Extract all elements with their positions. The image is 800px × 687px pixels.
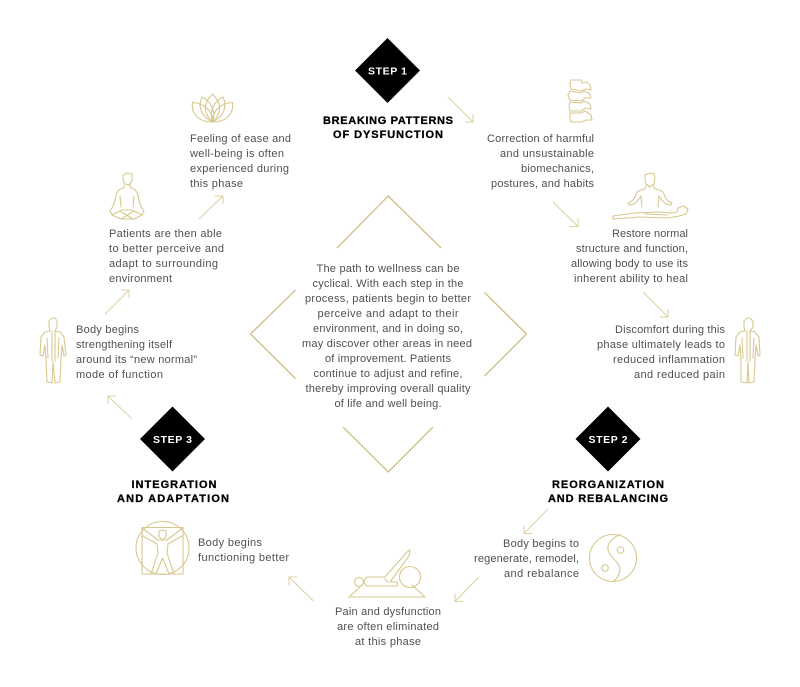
arrow: step 3 to strengthening <box>108 396 132 419</box>
text: functioning better: Body begins <box>198 537 262 549</box>
text: patients perceive: to better perceive and <box>109 243 224 255</box>
central diamond frame <box>250 196 526 472</box>
text: pain <box>335 606 441 648</box>
step 1 heading: BREAKING PATTERNS <box>323 115 453 127</box>
step 2 heading: AND REBALANCING <box>548 493 668 505</box>
text: regenerate: Body begins to <box>503 538 579 550</box>
icon: massage <box>613 173 688 219</box>
text: correction: Correction of harmful <box>487 133 594 145</box>
central text: of life and well being. <box>334 398 442 410</box>
arrow: spine to massage <box>553 202 578 226</box>
text: patients perceive: environment <box>109 273 172 285</box>
step 2 heading: REORGANIZATION <box>552 479 664 491</box>
text: strengthening: mode of function <box>76 369 163 381</box>
icon: body figure right <box>735 318 760 383</box>
text: regenerate <box>474 538 579 580</box>
text: strengthening: Body begins <box>76 324 140 336</box>
text: restore: structure and function, <box>576 243 688 255</box>
text: regenerate: and rebalance <box>504 568 579 580</box>
text: patients perceive: Patients are then able <box>109 228 222 240</box>
text: restore <box>571 228 688 285</box>
text: patients perceive <box>109 228 224 285</box>
central text: thereby improving overall quality <box>306 383 471 395</box>
arrow: step 1 to spine <box>448 97 473 122</box>
central text: of improvement. Patients <box>325 353 452 365</box>
step 2 badge: STEP 2 <box>588 434 628 446</box>
icon: body figure left <box>40 318 66 383</box>
icon: meditating figure <box>110 173 144 219</box>
text: feeling of ease: Feeling of ease and <box>190 133 291 145</box>
step 3 heading: AND ADAPTATION <box>117 493 229 505</box>
text: discomfort: Discomfort during this <box>615 324 726 336</box>
central text: environment, and in doing so, <box>313 323 463 335</box>
step 2 heading <box>548 479 668 505</box>
icon: lotus <box>192 94 233 122</box>
arrow: strengthening to patients <box>105 290 129 314</box>
text: functioning better <box>198 537 289 564</box>
text: functioning better: functioning better <box>198 552 289 564</box>
text: feeling of ease <box>189 133 291 190</box>
central text: perceive and adapt to their <box>318 308 459 320</box>
text: correction: biomechanics, <box>521 163 594 175</box>
step 1 heading: OF DYSFUNCTION <box>333 129 443 141</box>
step 2 badge <box>576 406 640 472</box>
step 3 heading: INTEGRATION <box>132 479 217 491</box>
text: discomfort <box>597 324 726 381</box>
arrow: pain to functioning <box>289 577 314 601</box>
text: restore: allowing body to use its <box>571 258 688 270</box>
icon: vitruvian man <box>136 522 189 574</box>
step 1 badge <box>355 38 420 103</box>
arrow: patients to ease <box>199 196 223 219</box>
icon: spine <box>568 80 592 122</box>
text: pain: at this phase <box>355 636 421 648</box>
arrow: rebalance to pain <box>455 577 479 602</box>
text: restore: Restore normal <box>612 228 688 240</box>
central text: may discover other areas in need <box>302 338 472 350</box>
step 1 badge: STEP 1 <box>368 66 407 78</box>
text: pain: are often eliminated <box>337 621 439 633</box>
arrow: step 2 to body begins <box>524 509 548 534</box>
text: correction <box>487 133 594 190</box>
central text <box>302 263 472 410</box>
central text: The path to wellness can be <box>316 263 460 275</box>
text: correction: postures, and habits <box>491 178 594 190</box>
central text: cyclical. With each step in the <box>312 278 464 290</box>
arrow: massage to discomfort <box>643 292 668 317</box>
text: feeling of ease: this phase <box>190 178 243 190</box>
text: discomfort: and reduced pain <box>634 369 725 381</box>
text: correction: and unsustainable <box>500 148 594 160</box>
icon: pilates <box>349 550 425 597</box>
step 3 badge: STEP 3 <box>153 434 192 446</box>
text: pain: Pain and dysfunction <box>335 606 441 618</box>
text: discomfort: reduced inflammation <box>613 354 725 366</box>
text: patients perceive: adapt to surrounding <box>109 258 218 270</box>
central text: process, patients begin to better <box>305 293 471 305</box>
icon: yin yang <box>590 534 636 582</box>
text: strengthening: strengthening itself <box>76 339 173 351</box>
step 1 heading <box>323 115 453 141</box>
text: feeling of ease: well-being is often <box>189 148 284 160</box>
central text: continue to adjust and refine, <box>314 368 462 380</box>
text: discomfort: phase ultimately leads to <box>597 339 725 351</box>
text: strengthening <box>76 324 197 381</box>
text: regenerate: regenerate, remodel, <box>474 553 579 565</box>
text: restore: inherent ability to heal <box>574 273 688 285</box>
step 3 heading <box>117 479 229 505</box>
step 3 badge <box>140 406 205 472</box>
text: strengthening: around its “new normal” <box>76 354 197 366</box>
text: feeling of ease: experienced during <box>190 163 289 175</box>
